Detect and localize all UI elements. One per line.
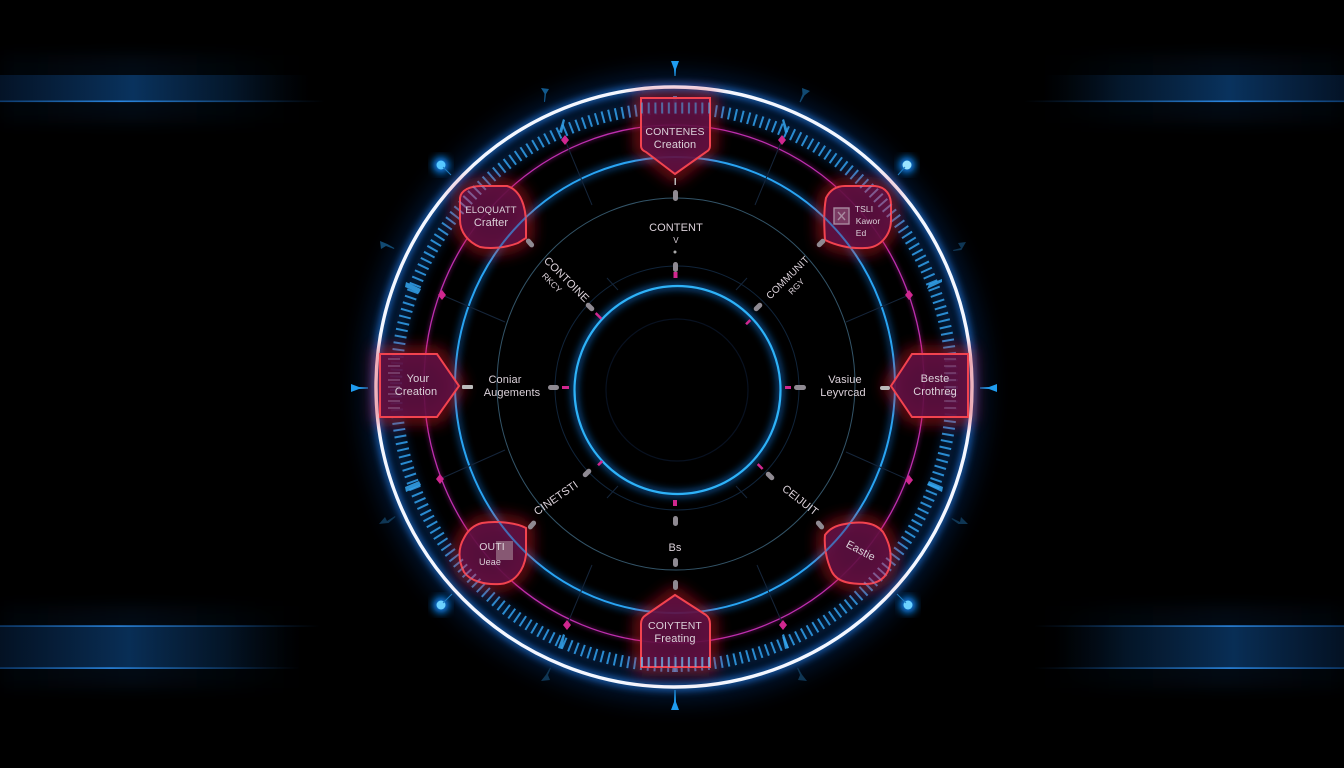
inner label: Ceiuit (rotated): CEIJUIT: [780, 483, 820, 518]
bright pin: bottom-right: [897, 594, 916, 613]
top-right panel label: TSLI: [855, 204, 873, 214]
magenta ring: [424, 125, 924, 643]
right panel label: Crothreg: [913, 386, 957, 398]
panel: right, Beste Crothreg: [890, 354, 968, 417]
panel: left, Your Creation: [380, 354, 459, 417]
side glow bar: bottom right: [1034, 606, 1344, 688]
bright pin: top-left: [433, 157, 451, 175]
pin: left-upper dim: [380, 241, 394, 249]
inner label: small bottom: Bs: [668, 542, 682, 554]
pin: right: [980, 384, 997, 392]
bright pin: top-right: [898, 157, 915, 175]
side glow bar: top left: [0, 55, 325, 123]
pin: left: [351, 384, 368, 392]
inner label: Vasiue Leyvrcad: Vasiue: [828, 374, 862, 386]
rings showing through the rounded panels: [460, 186, 891, 584]
connector pills: [462, 178, 890, 590]
bottom-left panel label: Ueae: [479, 557, 501, 567]
inner label: Contoine (rotated): RKCY: [540, 271, 564, 295]
inner label: Communit (rotated): COMMUNIT: [765, 255, 812, 302]
inner label: Cinetsti (rotated): CINETSTI: [532, 479, 581, 518]
blue ring: [455, 157, 895, 613]
tick scale ring: [395, 107, 953, 667]
right panel ticks: [944, 358, 956, 413]
inner label: Coniar Augements: Augements: [484, 387, 541, 399]
left panel label: Your: [407, 373, 430, 385]
left panel ticks: [388, 358, 400, 413]
inner label: Coniar Augements: Coniar: [488, 374, 522, 386]
faint ring: [555, 266, 799, 510]
top-right panel label: Ed: [856, 228, 866, 238]
inner label: Vasiue Leyvrcad: Leyvrcad: [820, 387, 866, 399]
panel: bottom-left, Outi Ueae: [460, 522, 526, 584]
pin: right-upper dim: [953, 242, 966, 251]
top-left panel label: Crafter: [474, 217, 508, 229]
bottom panel label: COIYTENT: [648, 620, 702, 632]
pin: right-lower dim: [952, 517, 968, 524]
panel: top-left, Eloquatt Crafter: [460, 186, 526, 248]
inner label: Content: V: [673, 236, 679, 245]
bright pin: bottom-left: [433, 594, 452, 613]
pin: top-right dim: [800, 88, 810, 102]
inner glowing ring: [574, 286, 780, 494]
pin: left-lower dim: [379, 516, 396, 524]
inner label: Contoine (rotated): CONTOINE: [541, 255, 591, 305]
panel: bottom-right, Eastie: [825, 523, 891, 584]
top-right panel label: Kawor: [856, 216, 880, 226]
pin: bottom: [671, 690, 679, 710]
pin: bottom-left dim: [541, 668, 551, 681]
bottom panel ticks: [641, 657, 710, 667]
vertical bottom connectors: [673, 516, 678, 526]
top-right panel icon: [834, 208, 849, 224]
outer pin markers: [351, 61, 997, 710]
pin: top-left dim: [541, 88, 549, 102]
circular diagram rings: [376, 87, 972, 687]
pin: bottom-right dim: [797, 668, 807, 681]
inner label: Communit (rotated): RGY: [786, 276, 807, 297]
top-left panel label: ELOQUATT: [465, 205, 517, 216]
side glow bar: top right: [1024, 55, 1344, 123]
horizontal left connectors: [462, 385, 473, 389]
panel: top-right, Tsli Kawor: [824, 186, 891, 248]
panel: bottom, Coiytent Freating: [641, 594, 710, 667]
bright ticks on scale ring: [405, 96, 943, 672]
top panel ticks: [641, 102, 710, 114]
diagonal connectors: [525, 238, 535, 248]
right panel label: Beste: [921, 373, 949, 385]
side glow bar: bottom left: [0, 606, 320, 688]
left panel label: Creation: [395, 386, 437, 398]
pin: top: [671, 61, 679, 76]
top panel label: Creation: [654, 139, 696, 151]
horizontal right connectors: [880, 386, 890, 390]
top panel label: CONTENES: [645, 126, 705, 138]
bottom-left panel thumbnail: [496, 541, 513, 560]
inner label: Content: CONTENT: [649, 222, 703, 234]
bottom panel label: Freating: [654, 633, 696, 645]
outer ring glow and core: [376, 87, 972, 687]
thin grey ring: [497, 198, 855, 570]
dark inner circle: [606, 319, 748, 461]
bottom-left panel label: OUTI: [479, 541, 505, 553]
radial spoke lines: [440, 140, 909, 625]
panel: top, Contenes Creation: [641, 98, 710, 175]
magenta ring nodes: [436, 135, 913, 630]
vertical top connectors: [673, 190, 678, 201]
bottom-right panel label: Eastie: [844, 538, 877, 564]
